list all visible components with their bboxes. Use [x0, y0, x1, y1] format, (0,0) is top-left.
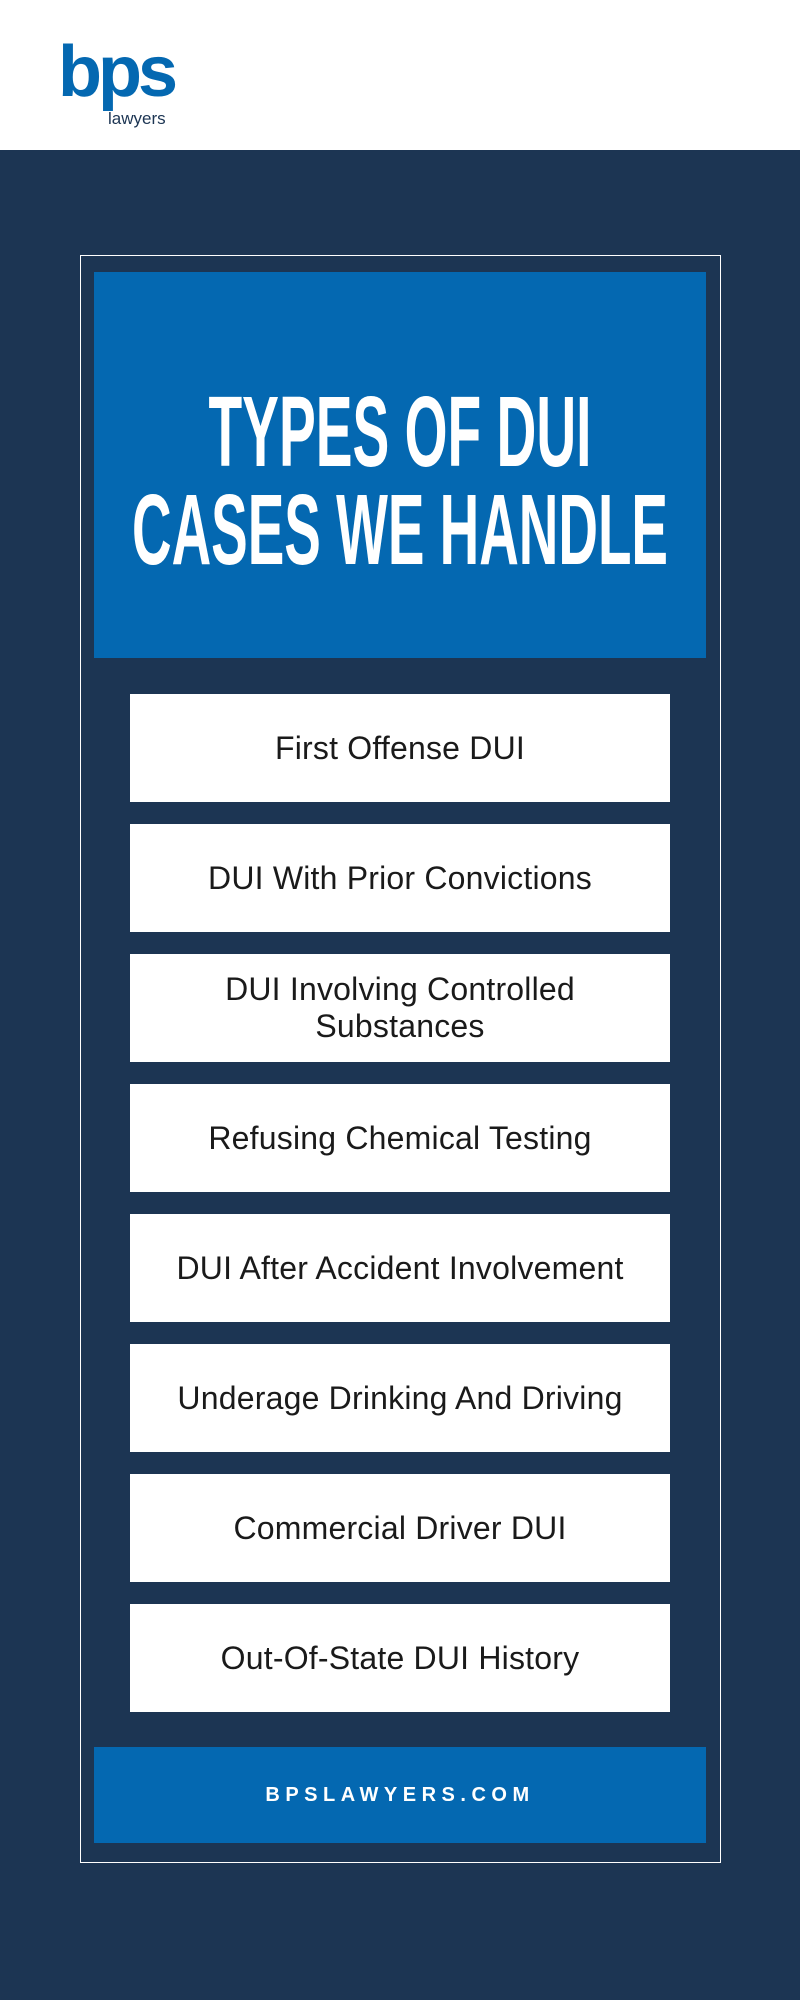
item: commercial	[130, 1474, 670, 1582]
item: out of state	[130, 1604, 670, 1712]
logo: lawyers	[108, 109, 166, 128]
item: refusing testing	[130, 1084, 670, 1192]
item: prior convictions: DUI With Prior Convictions	[208, 860, 592, 896]
outer frame	[80, 255, 721, 1863]
item: first offense: First Offense DUI	[275, 730, 525, 766]
item: controlled substances: DUI Involving Controlled	[225, 971, 575, 1007]
item: refusing testing: Refusing Chemical Testing	[208, 1120, 592, 1156]
item: commercial: Commercial Driver DUI	[233, 1510, 567, 1546]
item: first offense	[130, 694, 670, 802]
title	[94, 272, 706, 658]
item: accident	[130, 1214, 670, 1322]
logo: bps	[58, 32, 176, 112]
item: underage	[130, 1344, 670, 1452]
item: prior convictions	[130, 824, 670, 932]
footer	[94, 1747, 706, 1843]
item: controlled substances	[130, 954, 670, 1062]
header	[0, 0, 800, 150]
item: underage: Underage Drinking And Driving	[177, 1380, 623, 1416]
item: controlled substances: Substances	[315, 1008, 485, 1044]
item: out of state: Out-Of-State DUI History	[221, 1640, 579, 1676]
footer: BPSLAWYERS.COM	[265, 1784, 535, 1806]
item: accident: DUI After Accident Involvement	[176, 1250, 624, 1286]
